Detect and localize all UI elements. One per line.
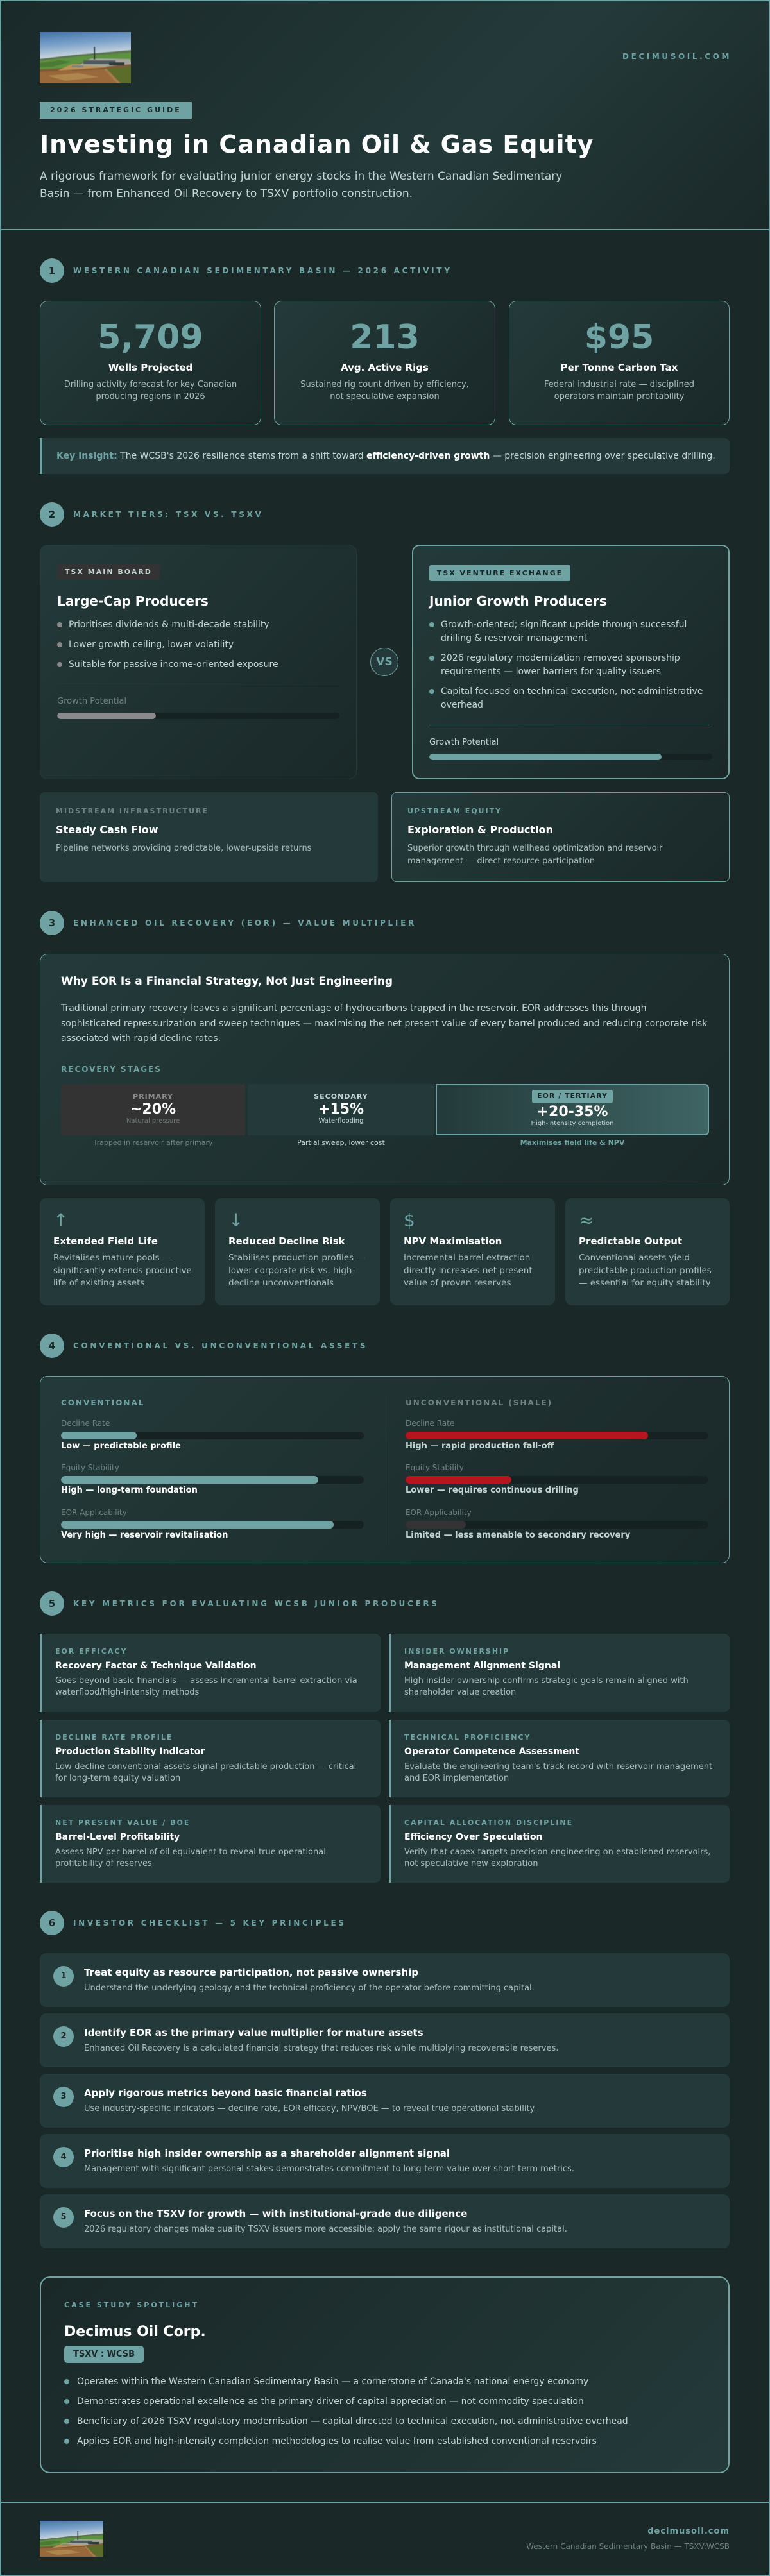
text: upstream description: Superior growth through wellhead optimization and reservoir bbox=[407, 843, 663, 853]
stat card: active rigs: not speculative expansion bbox=[330, 392, 440, 402]
panel: EOR explainer bbox=[40, 954, 730, 1185]
metric: NPV per BOE: Assess NPV per barrel of oil equivalent to reveal true operational bbox=[55, 1847, 326, 1857]
badge: ticker: TSXV : WCSB bbox=[73, 2350, 135, 2359]
column: unconventional bbox=[406, 1398, 708, 1540]
list: case study points: Demonstrates operational excellence as the primary driver of capital appreciation — not commodity speculation bbox=[77, 2396, 584, 2407]
subtitle: A rigorous framework for evaluating junior energy stocks in the Western Canadian Sedimentary bbox=[40, 170, 562, 183]
bar: conventional EOR applicability bbox=[61, 1521, 364, 1529]
feature card: extended field life: Extended Field Life bbox=[53, 1235, 158, 1247]
stat card: active rigs bbox=[274, 301, 495, 425]
section heading 2: 2 bbox=[49, 509, 55, 520]
text: EOR paragraph: sophisticated repressurization and sweep techniques — maximising the net present value of every barrel produced and reducing corporate risk bbox=[61, 1019, 707, 1029]
feature card: reduced decline risk: decline unconventionals bbox=[228, 1278, 334, 1288]
metric: capital allocation: not speculative new exploration bbox=[404, 1859, 538, 1868]
icon: dollar sign: $ bbox=[404, 1210, 415, 1231]
checklist item 4: 4 bbox=[60, 2152, 67, 2162]
feature card: extended field life bbox=[40, 1198, 205, 1305]
caption: secondary: Partial sweep, lower cost bbox=[297, 1139, 385, 1147]
heading: junior: Junior Growth Producers bbox=[429, 593, 607, 609]
section heading 1: 1 bbox=[49, 265, 55, 276]
metric: EOR efficacy: EOR EFFICACY bbox=[55, 1647, 127, 1656]
section heading 3: 3 bbox=[49, 917, 55, 929]
metric: insider ownership: Management Alignment Signal bbox=[404, 1661, 560, 1671]
list: junior traits: 2026 regulatory modernization removed sponsorship bbox=[441, 653, 680, 663]
list: junior traits: drilling & reservoir management bbox=[441, 633, 587, 643]
checklist item 5: Focus on the TSXV for growth — with institutional-grade due diligence bbox=[84, 2208, 467, 2219]
list: large-cap traits: Prioritises dividends & multi-decade stability bbox=[69, 620, 270, 630]
section heading 5: KEY METRICS FOR EVALUATING WCSB JUNIOR PRODUCERS bbox=[73, 1599, 440, 1608]
stage: secondary: Waterflooding bbox=[319, 1117, 363, 1124]
checklist item 4: Prioritise high insider ownership as a shareholder alignment signal bbox=[84, 2148, 450, 2159]
metric: capital allocation bbox=[389, 1805, 730, 1883]
icon: VS circle: VS bbox=[376, 656, 393, 668]
feature card: reduced decline risk: Reduced Decline Risk bbox=[228, 1235, 345, 1247]
metric: technical proficiency: and EOR implementation bbox=[404, 1774, 509, 1783]
column: unconventional: Equity Stability bbox=[406, 1463, 464, 1472]
stat card: wells projected: Wells Projected bbox=[108, 362, 193, 373]
badge: TSX main board bbox=[57, 564, 160, 580]
section heading 4 bbox=[40, 1334, 368, 1358]
metric: NPV per BOE: NET PRESENT VALUE / BOE bbox=[55, 1818, 190, 1827]
stat card: wells projected: producing regions in 2026 bbox=[96, 392, 205, 402]
badge: TSX venture exchange bbox=[429, 565, 570, 581]
list: junior traits: Growth-oriented; significant upside through successful bbox=[441, 620, 687, 630]
text: upstream description: management — direct resource participation bbox=[407, 856, 595, 866]
badge: TSX venture exchange: TSX VENTURE EXCHANGE bbox=[437, 569, 563, 577]
panel: midstream infrastructure bbox=[40, 792, 378, 882]
metric: decline rate profile: Low-decline conventional assets signal predictable production — critical bbox=[55, 1762, 356, 1772]
feature card: predictable output: Predictable Output bbox=[579, 1235, 682, 1247]
stat card: carbon tax: operators maintain profitability bbox=[554, 392, 684, 402]
section 2: market tiers bbox=[40, 502, 730, 882]
stat card: wells projected: 5,709 bbox=[98, 318, 203, 357]
section heading 1: WESTERN CANADIAN SEDIMENTARY BASIN — 2026 ACTIVITY bbox=[73, 266, 452, 275]
text: EOR paragraph: Traditional primary recovery leaves a significant percentage of hydrocarbons trapped in the reservoir. EOR addresses this through bbox=[61, 1003, 646, 1013]
image: oil rig thumbnail bbox=[40, 2521, 103, 2557]
section 6: investor checklist bbox=[40, 1911, 730, 2248]
stat card: active rigs: 213 bbox=[350, 318, 420, 357]
icon: VS circle bbox=[370, 648, 398, 676]
checklist item 4 bbox=[40, 2134, 730, 2188]
stat card: carbon tax bbox=[509, 301, 730, 425]
metric: EOR efficacy bbox=[40, 1634, 381, 1712]
checklist item 3: Use industry-specific indicators — decline rate, EOR efficacy, NPV/BOE — to reveal true operational stability. bbox=[84, 2104, 536, 2114]
bar: conventional decline rate bbox=[61, 1432, 364, 1439]
checklist item 5: 2026 regulatory changes make quality TSXV issuers more accessible; apply the same rigour as institutional capital. bbox=[84, 2224, 567, 2234]
bar: growth potential 82% bbox=[429, 754, 712, 760]
bar: shale EOR applicability bbox=[406, 1521, 708, 1529]
checklist item 4: Management with significant personal stakes demonstrates commitment to long-term value over short-term metrics. bbox=[84, 2164, 574, 2174]
feature card: NPV maximisation: value of proven reserves bbox=[404, 1278, 511, 1288]
list: junior traits: overhead bbox=[441, 700, 483, 710]
key insight callout bbox=[40, 438, 730, 474]
icon: up arrow: ↑ bbox=[53, 1210, 68, 1231]
list: case study points: Beneficiary of 2026 TSXV regulatory modernisation — capital directed to technical execution, not administrative overhead bbox=[77, 2416, 628, 2427]
column: conventional: Equity Stability bbox=[61, 1463, 119, 1472]
metric: EOR efficacy: Recovery Factor & Technique Validation bbox=[55, 1661, 257, 1671]
metric: decline rate profile bbox=[40, 1720, 381, 1797]
metric: decline rate profile: for long-term equity valuation bbox=[55, 1774, 180, 1783]
footer bbox=[0, 2502, 770, 2576]
label: midstream: MIDSTREAM INFRASTRUCTURE bbox=[56, 807, 209, 815]
checklist item 1 bbox=[40, 1953, 730, 2007]
bar: conventional equity stability bbox=[61, 1476, 364, 1484]
stat card: carbon tax: Federal industrial rate — disciplined bbox=[544, 380, 694, 389]
feature card: predictable output bbox=[565, 1198, 730, 1305]
feature card: extended field life: significantly extends productive bbox=[53, 1265, 192, 1275]
section heading 3 bbox=[40, 911, 416, 935]
metric: technical proficiency bbox=[389, 1720, 730, 1797]
checklist item 2: Identify EOR as the primary value multiplier for mature assets bbox=[84, 2027, 424, 2038]
checklist item 5: 5 bbox=[60, 2212, 67, 2222]
stage: primary bbox=[61, 1084, 245, 1135]
caption: EOR: Maximises field life & NPV bbox=[520, 1139, 624, 1147]
badge: TSX main board: TSX MAIN BOARD bbox=[65, 568, 152, 576]
stat card: carbon tax: Per Tonne Carbon Tax bbox=[561, 362, 678, 373]
feature card: NPV maximisation: directly increases net present bbox=[404, 1265, 533, 1275]
feature card: extended field life: Revitalises mature pools — bbox=[53, 1253, 171, 1263]
label: growth potential: Growth Potential bbox=[429, 738, 499, 747]
metric: capital allocation: Verify that capex targets precision engineering on established reservoirs, bbox=[404, 1847, 710, 1857]
column: conventional: Very high — reservoir revitalisation bbox=[61, 1530, 228, 1540]
section heading 6: INVESTOR CHECKLIST — 5 KEY PRINCIPLES bbox=[73, 1919, 346, 1928]
stat card: active rigs: Sustained rig count driven by efficiency, bbox=[300, 380, 469, 389]
list: large-cap traits: Suitable for passive income-oriented exposure bbox=[69, 659, 278, 670]
feature card: reduced decline risk bbox=[215, 1198, 380, 1305]
panel: upstream equity bbox=[391, 792, 730, 882]
list: case study points: Operates within the Western Canadian Sedimentary Basin — a cornerstone of Canada's national energy economy bbox=[77, 2377, 588, 2387]
checklist item 3: 3 bbox=[60, 2092, 67, 2101]
list: large-cap traits: Lower growth ceiling, lower volatility bbox=[69, 640, 234, 650]
section heading 6: 6 bbox=[49, 1917, 55, 1929]
stage: EOR tertiary bbox=[436, 1084, 709, 1135]
stage: primary: Natural pressure bbox=[126, 1117, 180, 1124]
checklist item 2: 2 bbox=[60, 2031, 67, 2041]
feature card: NPV maximisation: NPV Maximisation bbox=[404, 1235, 502, 1247]
checklist item 5 bbox=[40, 2194, 730, 2248]
panel: case study spotlight bbox=[40, 2276, 730, 2473]
stage: secondary bbox=[248, 1084, 434, 1135]
heading: Decimus Oil Corp: Decimus Oil Corp. bbox=[64, 2324, 206, 2340]
section heading 4: 4 bbox=[49, 1340, 55, 1352]
column: conventional: Low — predictable profile bbox=[61, 1441, 181, 1451]
badge: EOR / tertiary bbox=[532, 1090, 613, 1103]
section 4: conventional vs unconventional bbox=[40, 1334, 730, 1563]
feature card: reduced decline risk: lower corporate risk vs. high- bbox=[228, 1265, 355, 1275]
column: unconventional: Limited — less amenable to secondary recovery bbox=[406, 1530, 630, 1540]
metric: NPV per BOE: Barrel-Level Profitability bbox=[55, 1832, 180, 1842]
column: conventional: CONVENTIONAL bbox=[61, 1398, 144, 1407]
stage: EOR tertiary: +20-35% bbox=[537, 1104, 608, 1120]
bar: shale equity stability bbox=[406, 1476, 708, 1484]
list: case study points: Applies EOR and high-intensity completion methodologies to realise value from established conventional reservoirs bbox=[77, 2436, 597, 2446]
caption: primary: Trapped in reservoir after primary bbox=[93, 1139, 213, 1147]
heading: why EOR: Why EOR Is a Financial Strategy, Not Just Engineering bbox=[61, 975, 393, 988]
stage: secondary: +15% bbox=[318, 1101, 364, 1117]
title: Investing in Canadian Oil & Gas Equity bbox=[40, 130, 594, 158]
metric: technical proficiency: TECHNICAL PROFICIENCY bbox=[404, 1733, 531, 1741]
label: upstream: UPSTREAM EQUITY bbox=[407, 807, 502, 815]
image: oil rig on prairie landscape bbox=[40, 32, 131, 83]
checklist item 3 bbox=[40, 2074, 730, 2128]
section heading 3: ENHANCED OIL RECOVERY (EOR) — VALUE MULTIPLIER bbox=[73, 919, 416, 928]
feature card: reduced decline risk: Stabilises production profiles — bbox=[228, 1253, 365, 1263]
column: unconventional: UNCONVENTIONAL (SHALE) bbox=[406, 1398, 552, 1407]
metric: EOR efficacy: Goes beyond basic financials — assess incremental barrel extraction via bbox=[55, 1676, 357, 1686]
checklist item 1: 1 bbox=[60, 1971, 67, 1981]
key insight callout: Key Insight: The WCSB's 2026 resilience stems from a shift toward efficiency-driven growth — precision engineering over speculative drilling. bbox=[56, 451, 715, 461]
text: EOR paragraph bbox=[60, 1003, 707, 1044]
metric: insider ownership: shareholder value creation bbox=[404, 1688, 516, 1697]
section heading 5: 5 bbox=[49, 1598, 55, 1609]
subtitle bbox=[40, 170, 562, 200]
text: midstream description: Pipeline networks providing predictable, lower-upside returns bbox=[56, 843, 311, 853]
metric: technical proficiency: Operator Competence Assessment bbox=[404, 1747, 579, 1757]
list: large-cap traits bbox=[57, 620, 278, 670]
list: junior traits: Capital focused on technical execution, not administrative bbox=[441, 686, 703, 697]
checklist item 2 bbox=[40, 2013, 730, 2067]
stage: primary: ~20% bbox=[130, 1101, 176, 1117]
column: conventional: Decline Rate bbox=[61, 1419, 110, 1428]
metric: insider ownership: High insider ownership confirms strategic goals remain aligned with bbox=[404, 1676, 689, 1686]
heading: large-cap: Large-Cap Producers bbox=[57, 593, 209, 609]
badge: ticker bbox=[64, 2346, 144, 2363]
section 1: WCSB activity bbox=[40, 258, 730, 474]
section 5: key metrics bbox=[40, 1591, 730, 1883]
icon: down arrow: ↓ bbox=[228, 1210, 243, 1231]
badge: 2026 strategic guide bbox=[40, 102, 192, 119]
text: EOR paragraph: associated with rapid decline rates. bbox=[61, 1033, 221, 1044]
stat card: wells projected: Drilling activity forecast for key Canadian bbox=[64, 380, 237, 389]
column: unconventional: Decline Rate bbox=[406, 1419, 454, 1428]
panel: comparison bbox=[40, 1376, 730, 1563]
section heading 2: MARKET TIERS: TSX VS. TSXV bbox=[73, 510, 264, 519]
bar: growth potential 35% bbox=[57, 713, 339, 719]
checklist item 1: Treat equity as resource participation, not passive ownership bbox=[84, 1967, 418, 1978]
stat card: carbon tax: $95 bbox=[585, 318, 654, 357]
footer note: Western Canadian Sedimentary Basin — TSXV:WCSB bbox=[526, 2542, 730, 2551]
header banner bbox=[0, 0, 770, 230]
section heading 1 bbox=[40, 258, 452, 283]
metric: insider ownership: INSIDER OWNERSHIP bbox=[404, 1647, 509, 1656]
stat card: wells projected bbox=[40, 301, 261, 425]
badge: 2026 strategic guide: 2026 STRATEGIC GUIDE bbox=[50, 106, 182, 114]
column: unconventional: Lower — requires continuous drilling bbox=[406, 1486, 579, 1495]
column: conventional: High — long-term foundation bbox=[61, 1486, 198, 1495]
stage: EOR tertiary: High-intensity completion bbox=[531, 1120, 613, 1127]
section 3: enhanced oil recovery bbox=[40, 911, 730, 1305]
feature card: NPV maximisation bbox=[390, 1198, 555, 1305]
metric: EOR efficacy: waterflood/high-intensity methods bbox=[55, 1688, 199, 1697]
metric: insider ownership bbox=[389, 1634, 730, 1712]
checklist item 3: Apply rigorous metrics beyond basic financial ratios bbox=[84, 2087, 367, 2099]
metric: decline rate profile: Production Stability Indicator bbox=[55, 1747, 205, 1757]
list: junior traits bbox=[429, 620, 703, 710]
footer website: decimusoil.com bbox=[647, 2527, 730, 2536]
metric: decline rate profile: DECLINE RATE PROFILE bbox=[55, 1733, 173, 1741]
checklist item 2: Enhanced Oil Recovery is a calculated financial strategy that reduces risk while multiplying recoverable reserves. bbox=[84, 2044, 558, 2053]
list: case study points bbox=[64, 2377, 628, 2446]
column: conventional: EOR Applicability bbox=[61, 1508, 127, 1517]
label: case study: CASE STUDY SPOTLIGHT bbox=[64, 2301, 199, 2309]
feature card: NPV maximisation: Incremental barrel extraction bbox=[404, 1253, 530, 1263]
text: upstream description bbox=[407, 843, 663, 866]
label: recovery stages: RECOVERY STAGES bbox=[61, 1065, 162, 1074]
icon: approximately symbol: ≈ bbox=[579, 1210, 594, 1231]
heading: steady cash flow: Steady Cash Flow bbox=[56, 824, 158, 836]
metric: NPV per BOE: profitability of reserves bbox=[55, 1859, 152, 1868]
metric: NPV per BOE bbox=[40, 1805, 381, 1883]
badge: EOR / tertiary: EOR / TERTIARY bbox=[537, 1092, 608, 1100]
feature card: predictable output: Conventional assets yield bbox=[579, 1253, 690, 1263]
feature card: predictable output: predictable production profiles bbox=[579, 1265, 712, 1275]
column: unconventional: EOR Applicability bbox=[406, 1508, 472, 1517]
metric: capital allocation: Efficiency Over Speculation bbox=[404, 1832, 543, 1842]
bar: shale decline rate bbox=[406, 1432, 708, 1439]
website label: DECIMUSOIL.COM bbox=[622, 52, 732, 61]
metric: capital allocation: CAPITAL ALLOCATION DISCIPLINE bbox=[404, 1818, 573, 1827]
section heading 4: CONVENTIONAL VS. UNCONVENTIONAL ASSETS bbox=[73, 1341, 368, 1350]
label: growth potential: Growth Potential bbox=[57, 697, 126, 706]
panel: junior growth producers bbox=[412, 545, 730, 779]
column: conventional bbox=[61, 1398, 364, 1540]
feature card: predictable output: — essential for equity stability bbox=[579, 1278, 711, 1288]
list: junior traits: requirements — lower barriers for quality issuers bbox=[441, 666, 661, 677]
section heading 5 bbox=[40, 1591, 440, 1616]
panel: large-cap producers bbox=[40, 545, 357, 779]
stage: secondary: SECONDARY bbox=[314, 1092, 368, 1101]
heading: exploration: Exploration & Production bbox=[407, 824, 553, 836]
column: unconventional: High — rapid production fall-off bbox=[406, 1441, 554, 1451]
section heading 2 bbox=[40, 502, 264, 527]
checklist item 1: Understand the underlying geology and the technical proficiency of the operator before committing capital. bbox=[84, 1983, 535, 1993]
stat card: active rigs: Avg. Active Rigs bbox=[341, 362, 429, 373]
subtitle: Basin — from Enhanced Oil Recovery to TSXV portfolio construction. bbox=[40, 187, 413, 200]
metric: technical proficiency: Evaluate the engineering team's track record with reservoir management bbox=[404, 1762, 712, 1772]
section heading 6 bbox=[40, 1911, 346, 1935]
stage: primary: PRIMARY bbox=[133, 1092, 173, 1101]
feature card: extended field life: life of existing assets bbox=[53, 1278, 144, 1288]
